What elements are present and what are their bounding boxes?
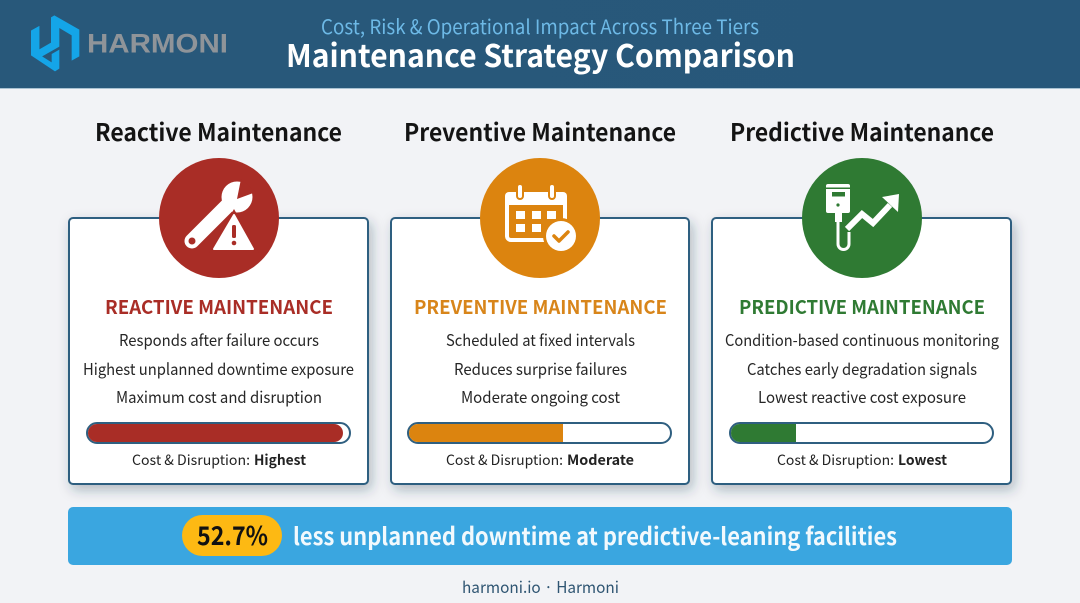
panel: predictive maintenance — [712, 158, 1011, 484]
caption: Lowest — [898, 450, 947, 470]
description lines: Scheduled at fixed intervals — [446, 327, 635, 351]
description lines: Condition-based continuous monitoring — [725, 327, 999, 351]
caption: Highest — [254, 450, 306, 470]
caption: Cost & Disruption: — [446, 450, 563, 470]
caption — [777, 450, 947, 470]
panel: reactive maintenance — [69, 158, 368, 484]
card title: PREDICTIVE MAINTENANCE — [739, 293, 985, 320]
caption: Cost & Disruption: — [777, 450, 894, 470]
card title: PREVENTIVE MAINTENANCE — [414, 293, 667, 320]
panel: preventive maintenance — [391, 158, 689, 484]
progress bar: highest — [87, 423, 350, 443]
description lines: Maximum cost and disruption — [116, 384, 322, 408]
stat pill: 52.7% — [197, 516, 268, 553]
caption: Moderate — [567, 450, 634, 470]
description lines: Moderate ongoing cost — [461, 384, 620, 408]
description lines: Responds after failure occurs — [119, 327, 319, 351]
caption — [446, 450, 634, 470]
description lines: Reduces surprise failures — [454, 356, 627, 380]
callout banner — [68, 507, 1012, 565]
caption — [132, 450, 306, 470]
logo: Harmoni — [31, 15, 228, 71]
column heading: predictive: Predictive Maintenance — [730, 113, 994, 148]
card title: REACTIVE MAINTENANCE — [105, 293, 333, 320]
description lines — [83, 327, 354, 408]
footer: harmoni.io · Harmoni — [462, 574, 619, 598]
header band — [0, 0, 1080, 89]
description lines: Catches early degradation signals — [747, 356, 977, 380]
description lines: Lowest reactive cost exposure — [758, 384, 966, 408]
description lines: Highest unplanned downtime exposure — [83, 356, 354, 380]
column heading: preventive: Preventive Maintenance — [404, 113, 676, 148]
icon: calendar with check — [480, 158, 600, 278]
icon: sensor with rising trend — [802, 158, 922, 278]
logo wordmark: HARMONI — [87, 28, 228, 58]
callout text: less unplanned downtime at predictive-leaning facilities — [293, 517, 897, 552]
title: Maintenance Strategy Comparison — [286, 31, 795, 76]
progress bar: moderate — [408, 423, 671, 443]
progress bar: lowest — [730, 423, 993, 443]
description lines — [725, 327, 999, 408]
logo mark — [31, 15, 79, 71]
column heading: reactive: Reactive Maintenance — [95, 113, 342, 148]
subtitle: Cost, Risk & Operational Impact Across Three Tiers — [321, 11, 759, 40]
caption: Cost & Disruption: — [132, 450, 250, 470]
description lines — [446, 327, 635, 408]
icon: wrench and warning — [159, 158, 279, 278]
